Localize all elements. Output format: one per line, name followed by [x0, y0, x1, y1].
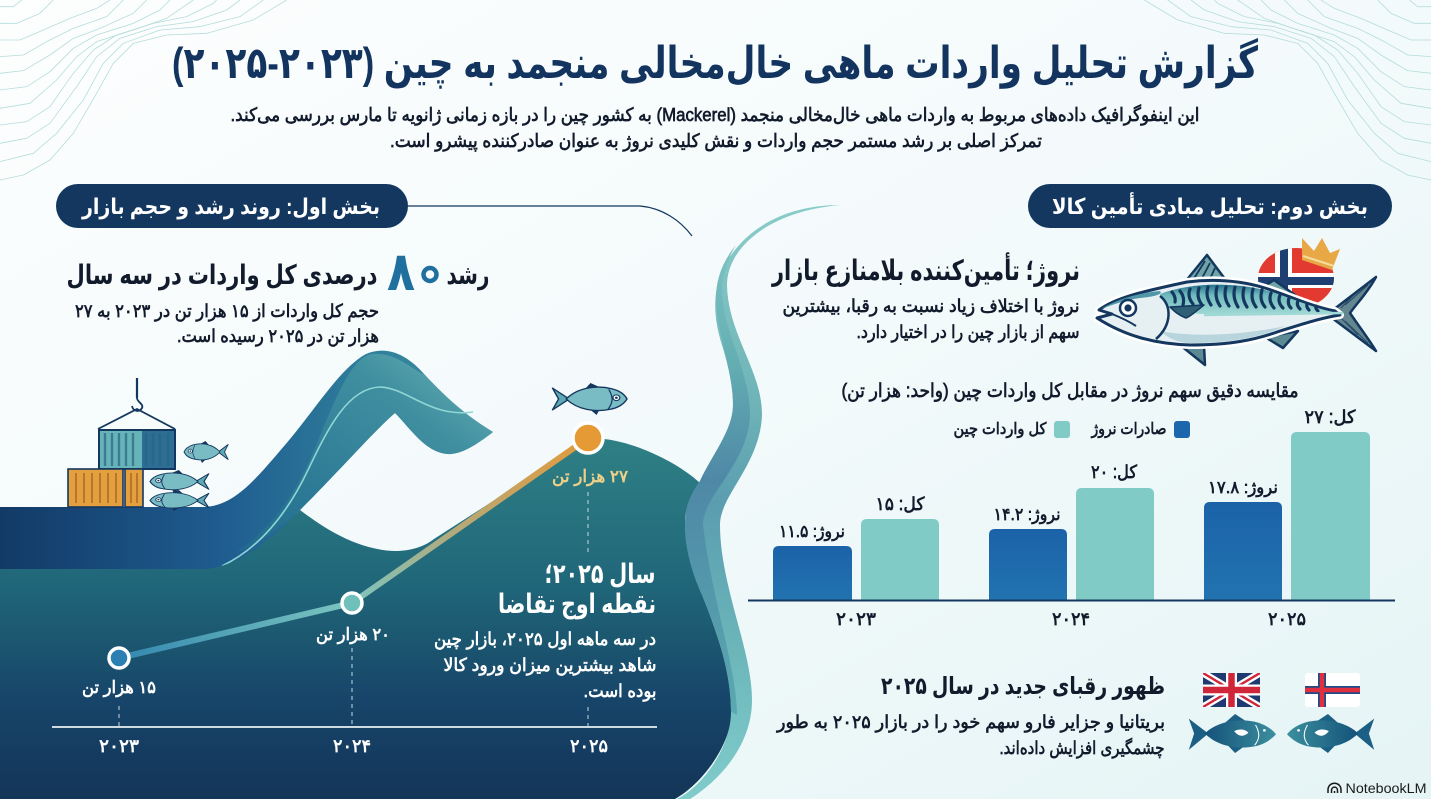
- Norway description: [782, 296, 1080, 343]
- chart legend: کل واردات چین: [954, 421, 1047, 439]
- icon: UK fish: [1189, 714, 1276, 753]
- chart legend: [954, 421, 1190, 439]
- callout: 2025 peak demand: بوده است.: [584, 681, 656, 702]
- callout: 2025 peak demand: سال ۲۰۲۵؛: [544, 559, 656, 589]
- callout: 2025 peak demand: شاهد بیشترین میزان ورود کالا: [444, 655, 656, 676]
- intro text: [231, 104, 1200, 152]
- growth description: هزار تن در ۲۰۲۵ رسیده است.: [177, 326, 379, 347]
- bar chart: Norway vs total imports: ۲۰۲۵: [1268, 609, 1306, 629]
- bar chart: Norway vs total imports: ۲۰۲۳: [836, 609, 876, 629]
- Norway description: نروژ با اختلاف زیاد نسبت به رقبا، بیشترین: [782, 296, 1080, 317]
- line chart: total imports: ۱۵ هزار تن: [82, 678, 156, 697]
- chart title: مقایسه دقیق سهم نروژ در مقابل کل واردات چین (واحد: هزار تن): [842, 381, 1298, 402]
- wave ribbon: dock and swell: [0, 351, 493, 570]
- headline: 80 percent growth: ۸۰: [387, 242, 443, 302]
- headline: 80 percent growth: درصدی کل واردات در سه سال: [66, 260, 378, 291]
- container and hook illustration: [68, 378, 175, 507]
- line chart: total imports: [52, 423, 657, 756]
- line chart: total imports: ۲۷ هزار تن: [552, 467, 628, 486]
- heading: Norway: نروژ؛ تأمین‌کننده بلامنازع بازار: [771, 252, 1080, 287]
- bar chart: Norway vs total imports: نروژ: ۱۴.۲: [994, 505, 1060, 524]
- bar chart: Norway vs total imports: نروژ: ۱۷.۸: [1208, 478, 1278, 497]
- icon: mackerel: [1097, 255, 1376, 365]
- bar chart: Norway vs total imports: کل: ۲۷: [1304, 407, 1356, 427]
- competitors description: [776, 712, 1165, 759]
- sea with timeline background: [0, 439, 732, 799]
- bar chart: Norway vs total imports: کل: ۲۰: [1091, 462, 1137, 482]
- intro text: این اینفوگرافیک داده‌های مربوط به واردات ماهی خال‌مخالی منجمد (Mackerel) به کشور چین را در بازه زمانی ژانویه تا مارس بررسی می‌کند.: [231, 104, 1200, 126]
- connector line: section one: [408, 206, 692, 236]
- icon: fish above peak: [553, 383, 627, 415]
- line chart: total imports: ۲۰۲۵: [570, 736, 608, 756]
- callout: 2025 peak demand: در سه ماهه اول ۲۰۲۵، بازار چین: [434, 629, 656, 650]
- competitors description: چشمگیری افزایش داده‌اند.: [1000, 737, 1164, 759]
- bar chart: Norway vs total imports: کل: ۱۵: [876, 494, 925, 514]
- growth description: حجم کل واردات از ۱۵ هزار تن در ۲۰۲۳ به ۲۷: [75, 301, 379, 322]
- heading pill: section two: [1028, 184, 1392, 228]
- NotebookLM mark: NotebookLM: [1346, 780, 1426, 796]
- competitors description: بریتانیا و جزایر فارو سهم خود را در بازار ۲۰۲۵ به طور: [776, 712, 1165, 733]
- chart legend: صادرات نروژ: [1091, 421, 1166, 439]
- line chart: total imports: ۲۰۲۴: [333, 736, 371, 756]
- line chart: total imports: ۲۰۲۳: [99, 736, 139, 756]
- flowing divider ribbon: [677, 205, 840, 799]
- callout: 2025 peak demand: نقطه اوج تقاضا: [498, 589, 656, 620]
- icon: Faroe fish: [1287, 714, 1374, 753]
- intro text: تمرکز اصلی بر رشد مستمر حجم واردات و نقش کلیدی نروژ به عنوان صادرکننده پیشرو است.: [390, 130, 1042, 152]
- heading: new competitors: ظهور رقبای جدید در سال ۲۰۲۵: [881, 673, 1165, 700]
- headline: 80 percent growth: رشد: [446, 260, 490, 291]
- heading pill: section two: بخش دوم: تحلیل مبادی تأمین کالا: [1052, 191, 1368, 220]
- bar chart: Norway vs total imports: نروژ: ۱۱.۵: [779, 522, 845, 541]
- callout: 2025 peak demand: [434, 559, 656, 702]
- heading pill: section one: [56, 184, 408, 228]
- icon: stacked fish: [150, 441, 228, 511]
- line chart: total imports: ۲۰ هزار تن: [316, 625, 390, 644]
- icon: UK flag: [1203, 673, 1260, 707]
- growth description: [75, 301, 379, 347]
- headline: 80 percent growth: [66, 242, 490, 302]
- icon: Faroe flag: [1305, 673, 1360, 707]
- icon: Norway flag and crown: [1258, 238, 1340, 302]
- bar chart: Norway vs total imports: [748, 407, 1395, 629]
- heading pill: section one: بخش اول: روند رشد و حجم بازار: [81, 194, 380, 220]
- bar chart: Norway vs total imports: ۲۰۲۴: [1052, 609, 1090, 629]
- Norway description: سهم از بازار چین را در اختیار دارد.: [856, 322, 1080, 343]
